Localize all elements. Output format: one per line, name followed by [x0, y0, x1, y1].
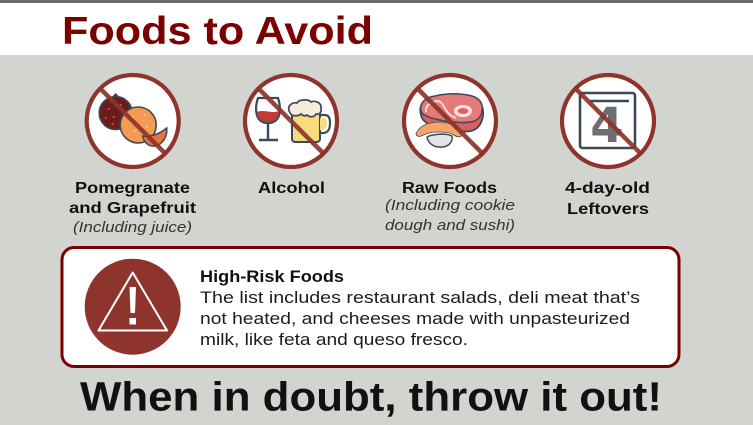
- callout body text: not heated, and cheeses made with unpasteurized: [200, 310, 630, 328]
- label: (Including cookie: [385, 198, 515, 214]
- icon: steak and sushi crossed out: [404, 75, 496, 167]
- label: [385, 180, 515, 234]
- item: alcohol: [245, 75, 337, 197]
- item: raw foods: [385, 75, 515, 234]
- label: 4-day-old: [565, 180, 650, 197]
- label: [69, 180, 197, 236]
- icon: warning triangle: [85, 259, 181, 355]
- item: pomegranate and grapefruit: [69, 75, 197, 236]
- icon: pomegranate and grapefruit crossed out: [87, 75, 179, 167]
- label: (Including juice): [73, 220, 192, 236]
- icon: calendar page crossed out: 4: [590, 98, 624, 154]
- panel: high-risk foods callout: [62, 248, 679, 366]
- title: Foods to Avoid: [62, 10, 373, 53]
- callout body text: [200, 289, 640, 349]
- label: and Grapefruit: [69, 200, 197, 217]
- icon: calendar page crossed out: [562, 75, 654, 167]
- item: leftovers: [562, 75, 654, 218]
- label: Raw Foods: [402, 180, 497, 197]
- closing message: When in doubt, throw it out!: [80, 374, 662, 420]
- callout heading: High-Risk Foods: [200, 268, 344, 286]
- label: [565, 180, 650, 218]
- callout body text: milk, like feta and queso fresco.: [200, 331, 468, 349]
- icon: wine and beer crossed out: [245, 75, 337, 167]
- label: Pomegranate: [75, 180, 190, 197]
- label: Alcohol: [258, 180, 325, 197]
- header band: [0, 3, 753, 55]
- label: Leftovers: [567, 201, 649, 218]
- callout body text: The list includes restaurant salads, deli meat that’s: [200, 289, 640, 307]
- label: dough and sushi): [385, 218, 515, 234]
